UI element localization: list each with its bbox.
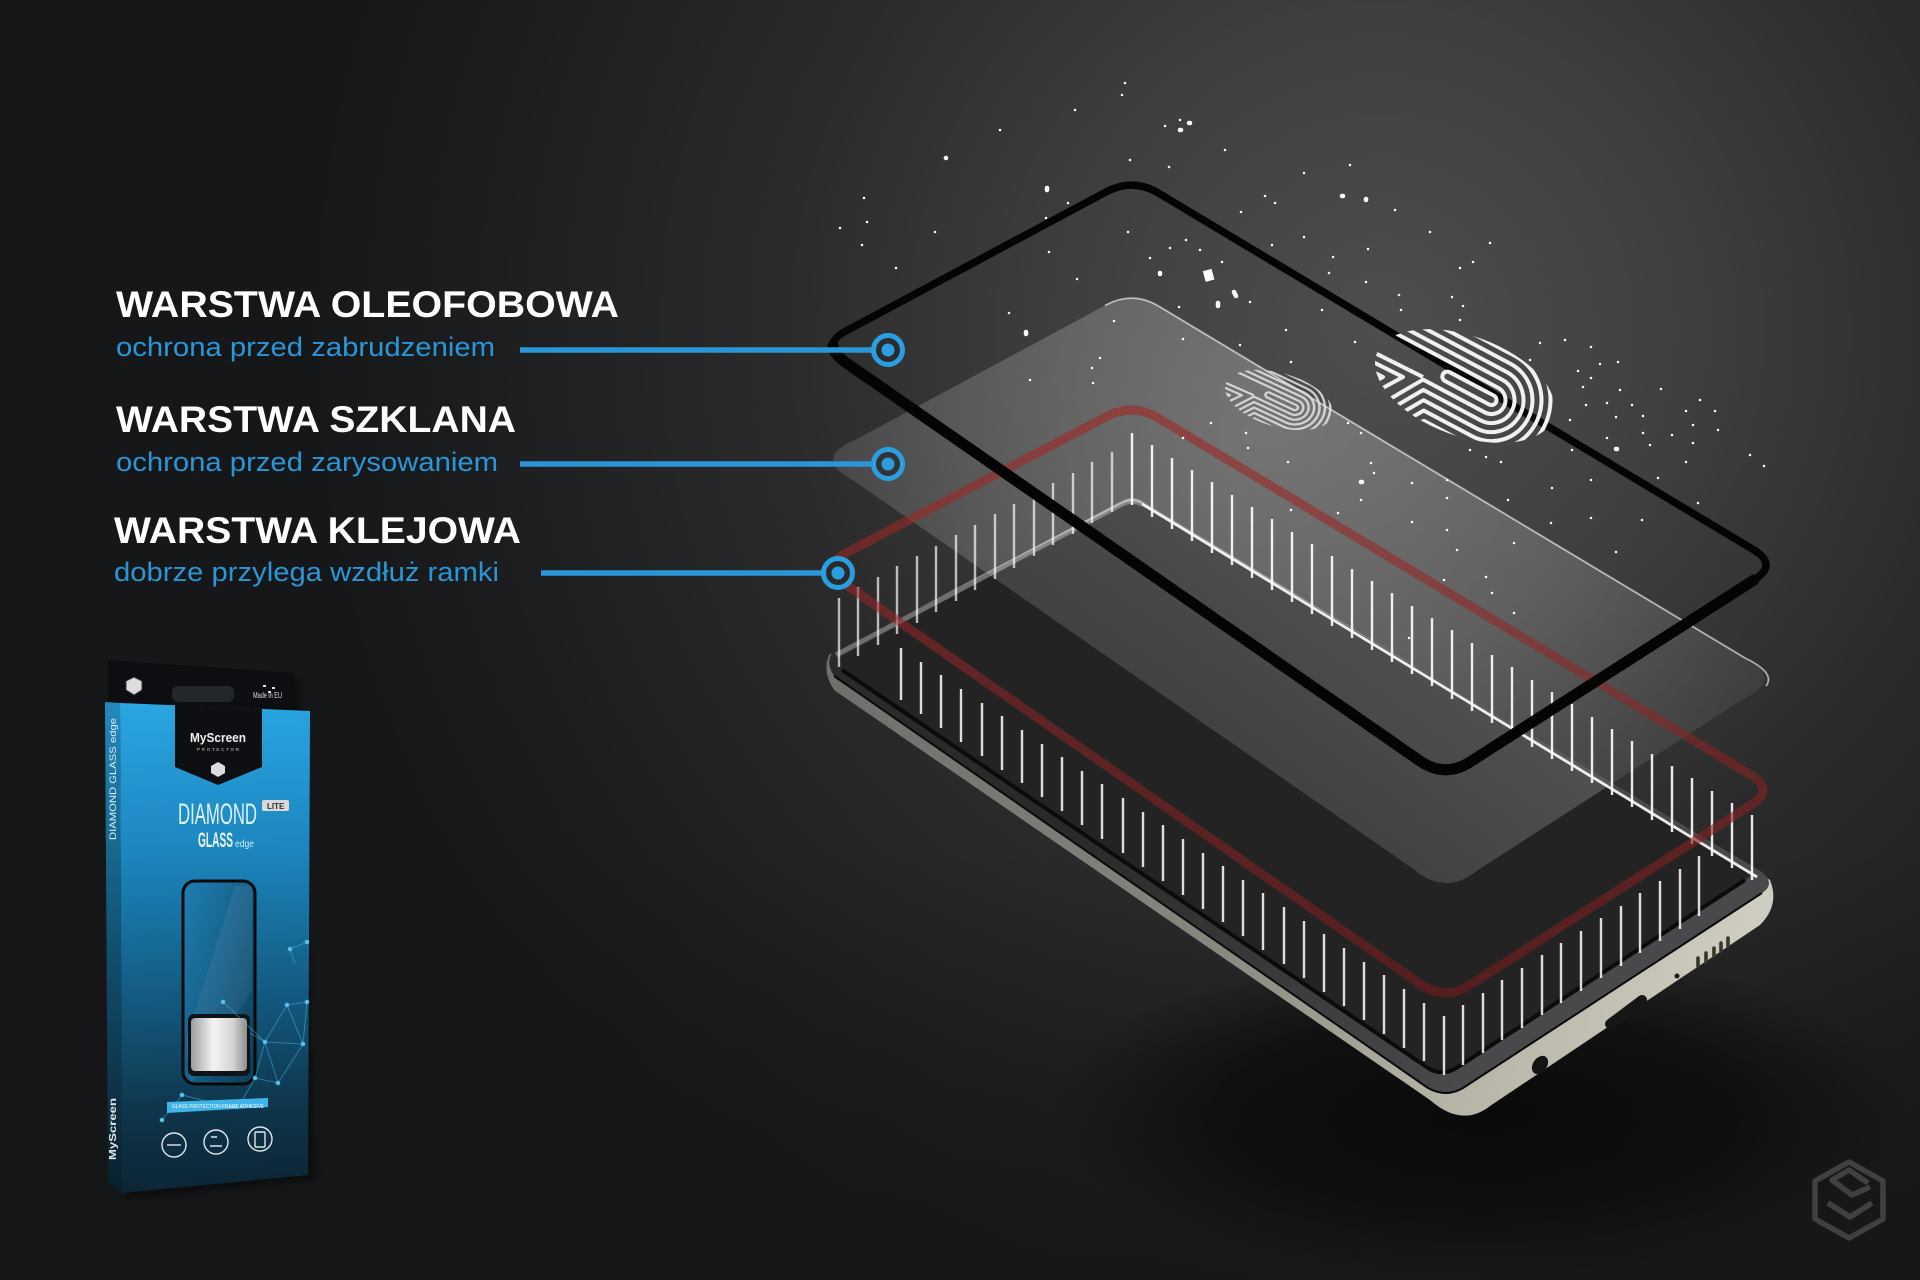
phone shadow bbox=[1050, 946, 1910, 1278]
microphone bbox=[1674, 974, 1680, 978]
headphone jack bbox=[1529, 1053, 1551, 1077]
package shadow bbox=[110, 670, 316, 1200]
charging port bbox=[1610, 1000, 1642, 1024]
lite badge bbox=[262, 800, 289, 811]
subheading: ochrona przed zabrudzeniem bbox=[116, 332, 495, 362]
subheading: dobrze przylega wzdłuż ramki bbox=[114, 557, 499, 587]
red adhesive frame bbox=[833, 410, 1763, 993]
fingerprint large bbox=[1280, 257, 1596, 569]
top left logo bbox=[126, 677, 142, 695]
upper left pins bbox=[839, 452, 1112, 667]
phone bezel bbox=[829, 502, 1769, 1093]
lower right pins bbox=[1463, 856, 1699, 1065]
hang slot bbox=[172, 686, 234, 702]
watermark logo bbox=[1815, 1162, 1883, 1238]
small tab logo bbox=[211, 762, 225, 777]
package top hanger bbox=[108, 660, 294, 712]
phone illustration bbox=[826, 498, 1773, 1116]
bezel lower shadow line bbox=[834, 676, 1762, 1093]
edge label: edge bbox=[235, 839, 254, 850]
heading: WARSTWA SZKLANA bbox=[116, 399, 516, 440]
package spine bbox=[105, 702, 122, 1193]
network pattern bbox=[160, 940, 309, 1122]
dust particles bbox=[840, 83, 1764, 638]
leader line bbox=[520, 347, 874, 353]
heading: WARSTWA KLEJOWA bbox=[114, 510, 521, 551]
callout: warstwa oleofobowa bbox=[116, 284, 902, 364]
black oleophobic frame bbox=[833, 185, 1766, 770]
made in eu: Made in EU bbox=[253, 691, 282, 700]
screen edge highlights bbox=[836, 502, 1757, 877]
glass layer bbox=[833, 298, 1768, 883]
fingerprint small bbox=[1168, 332, 1357, 497]
lower left pins bbox=[901, 648, 1444, 1075]
glass sheen on package phone bbox=[186, 886, 252, 1085]
phone on package bbox=[183, 881, 255, 1084]
phone body bbox=[826, 498, 1773, 1116]
diamond title: DIAMOND bbox=[178, 798, 257, 831]
marker bbox=[874, 450, 902, 478]
spine text: DIAMOND GLASS edge bbox=[108, 718, 118, 840]
marker bbox=[824, 558, 852, 588]
callout: warstwa klejowa bbox=[114, 510, 852, 588]
leader line bbox=[520, 461, 874, 467]
leader line bbox=[541, 570, 824, 576]
made in eu bbox=[253, 685, 282, 700]
subheading: ochrona przed zarysowaniem bbox=[116, 447, 498, 477]
heading: WARSTWA OLEOFOBOWA bbox=[116, 284, 619, 325]
product package bbox=[105, 660, 316, 1200]
upper right pins bbox=[1132, 433, 1752, 880]
protector label: PROTECTOR bbox=[197, 747, 240, 752]
lite badge: LITE bbox=[267, 802, 285, 811]
package front bbox=[120, 703, 310, 1193]
callout: warstwa szklana bbox=[116, 399, 902, 478]
feature icons bbox=[162, 1127, 272, 1157]
glass seen over screen bbox=[991, 502, 1606, 883]
marker bbox=[874, 336, 902, 364]
product package: GLASS bbox=[198, 829, 233, 852]
silver card bbox=[188, 1014, 250, 1076]
phone screen bbox=[835, 499, 1758, 1074]
speaker holes bbox=[1698, 938, 1728, 966]
feature banner: GLASS PROTECTION FRAME ADHESIVE bbox=[172, 1104, 265, 1110]
brand name: MyScreen bbox=[190, 730, 246, 745]
alignment lines bbox=[839, 433, 1752, 1075]
feature banner bbox=[167, 1098, 268, 1113]
spine brand: MyScreen bbox=[108, 1098, 119, 1160]
brand hanger tab bbox=[175, 705, 262, 785]
screen lower shadow edge bbox=[842, 670, 1745, 1072]
